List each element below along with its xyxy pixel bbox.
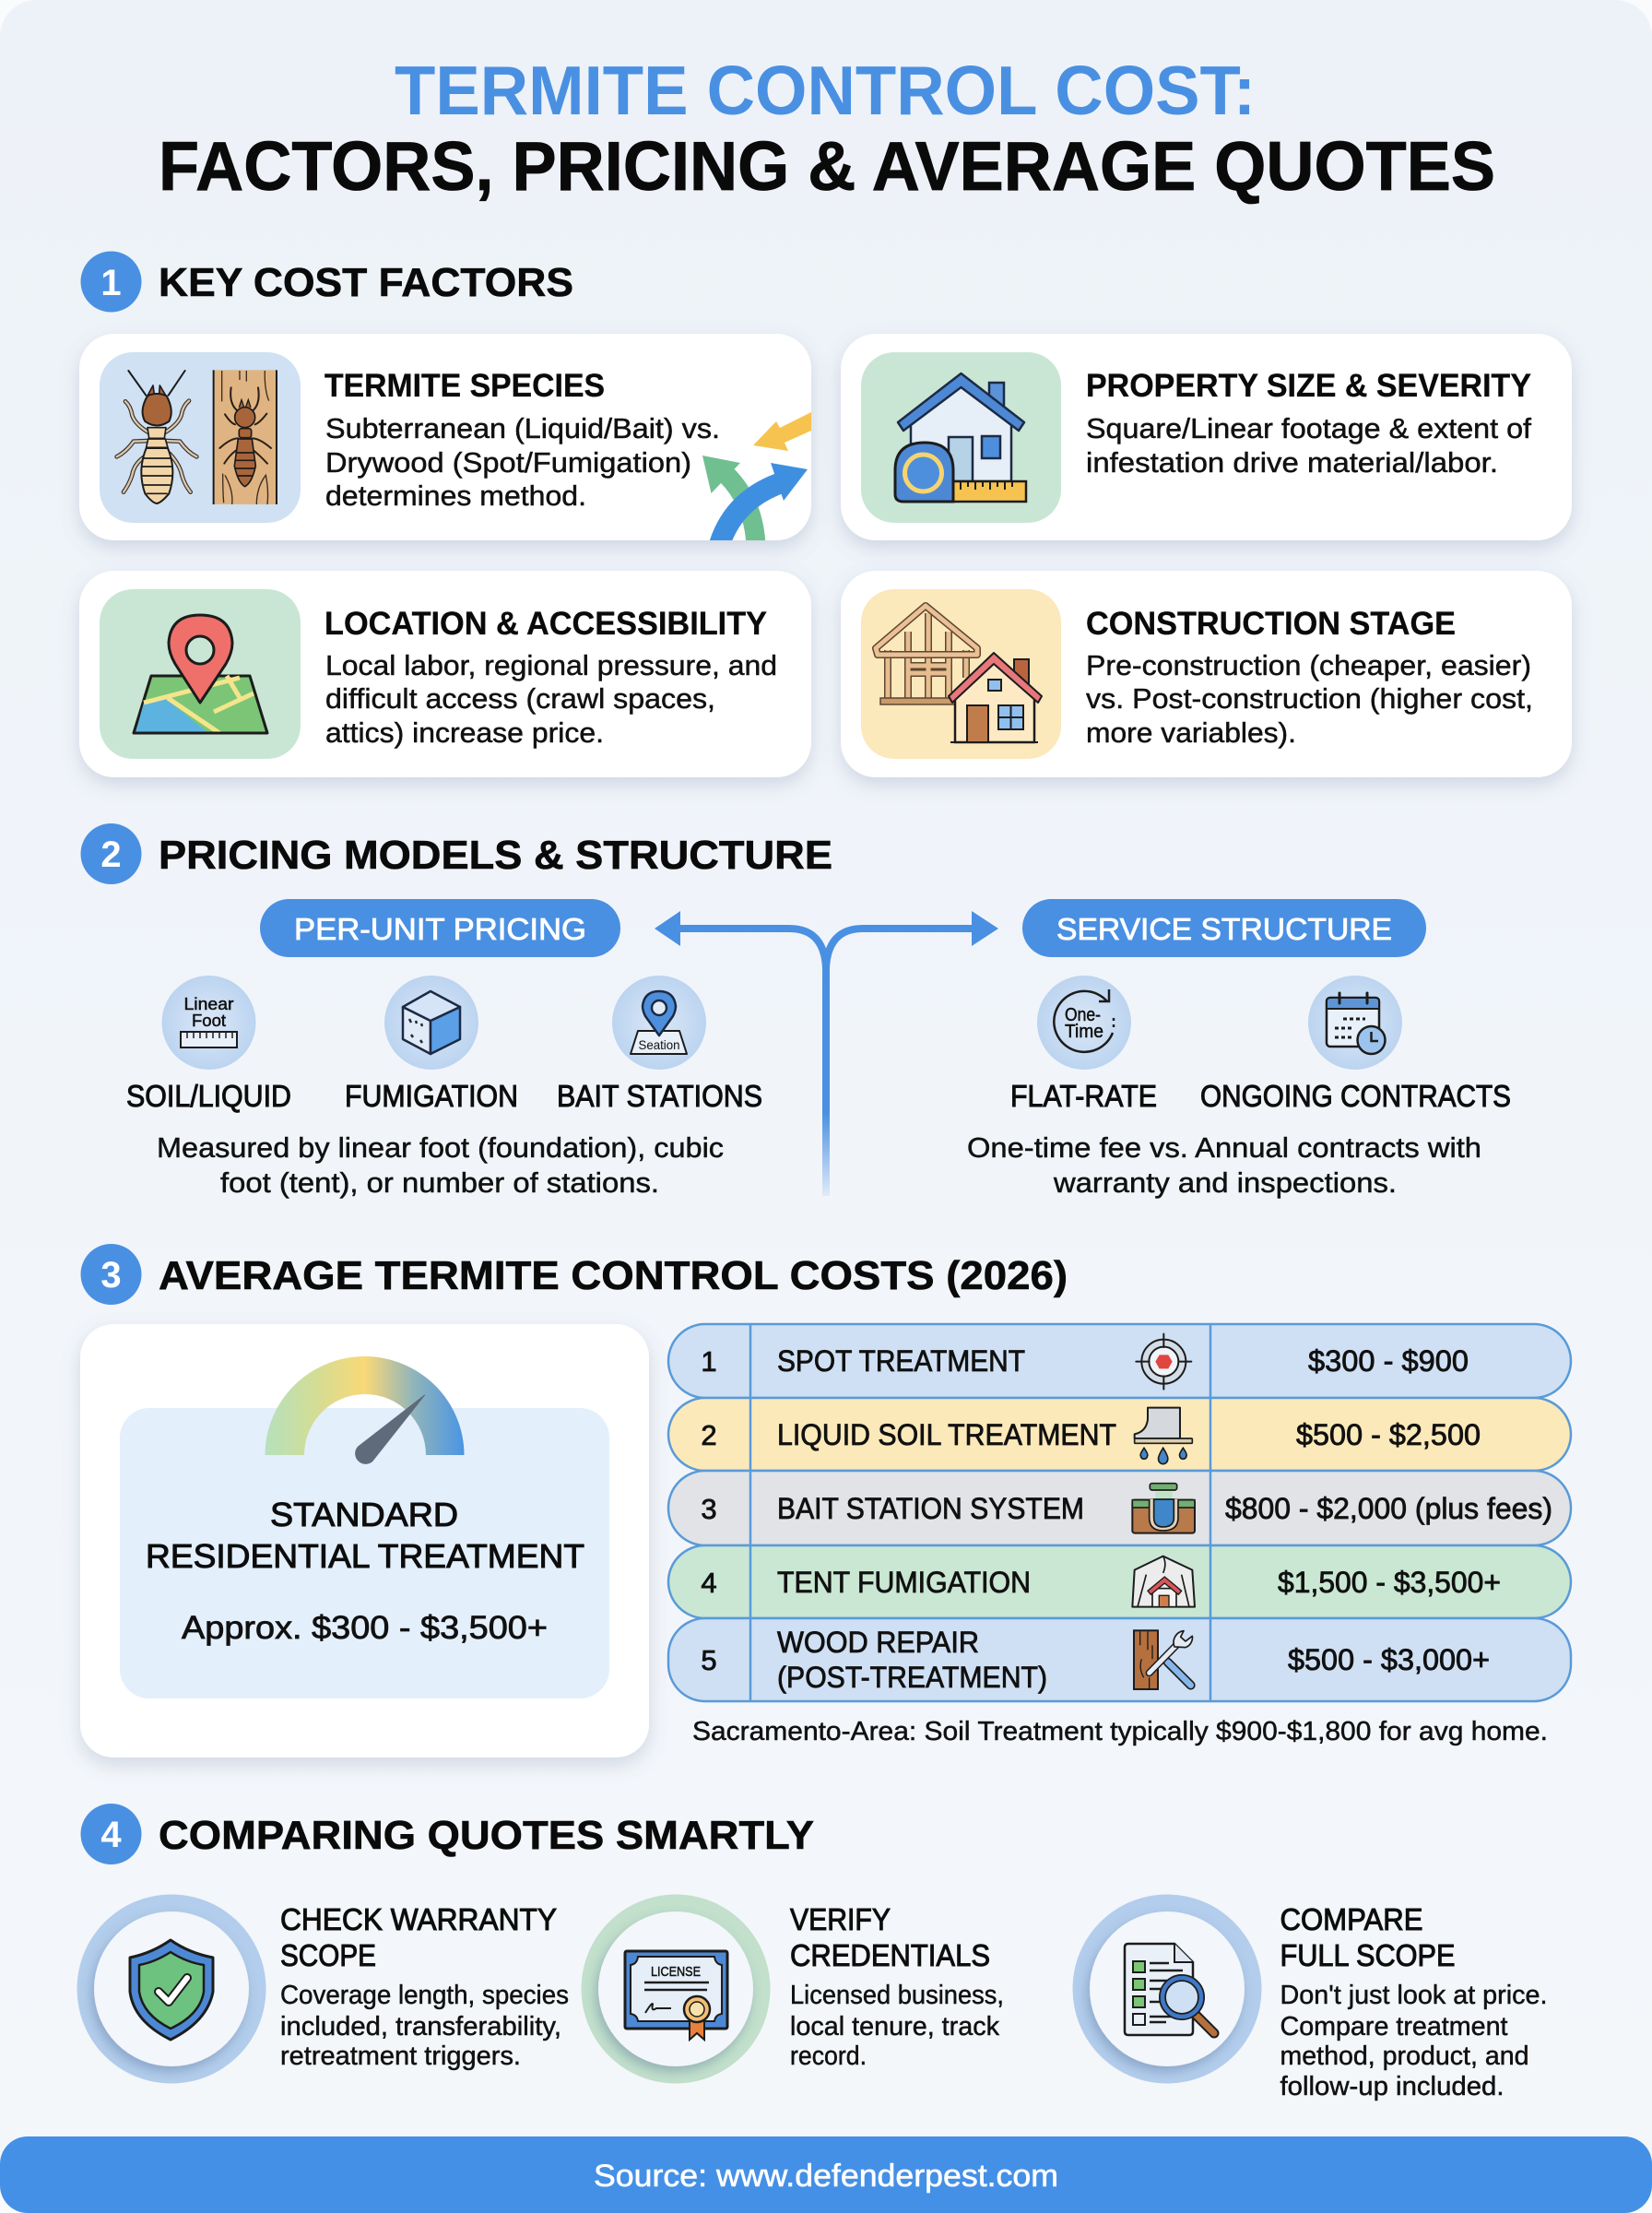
icon: linear foot: Foot [192,1012,226,1030]
text: location description: Local labor, regional pressure, and [325,649,777,681]
label: flat-rate: FLAT-RATE [1010,1079,1157,1113]
icon: bait station pin [612,976,706,1070]
text: compare description: method, product, and [1280,2041,1528,2071]
text: service description: warranty and inspections. [1053,1166,1397,1199]
text: treatment label: RESIDENTIAL TREATMENT [146,1537,584,1575]
heading: verify credentials: VERIFY [790,1902,891,1936]
section heading: average costs: AVERAGE TERMITE CONTROL COSTS (2026) [159,1253,1068,1298]
heading: compare full scope: COMPARE [1280,1902,1423,1936]
panel: verify credentials [581,1894,1004,2084]
pill: per-unit pricing: PER-UNIT PRICING [294,912,586,946]
row 3: bait station system [668,1471,1571,1545]
panel: construction stage [841,571,1572,777]
text: sacramento footnote: Sacramento-Area: Soil Treatment typically $900-$1,800 for avg home. [692,1717,1548,1746]
section heading: pricing models: 2 [100,834,122,875]
text: treatment label [146,1496,584,1575]
row 2: liquid soil treatment: 2 [701,1419,717,1451]
title [159,52,1495,205]
text: property size description [1086,412,1531,479]
icon: house frame and finished house [861,589,1061,759]
row 2: liquid soil treatment: LIQUID SOIL TREATMENT [777,1418,1116,1451]
row 4: tent fumigation: TENT FUMIGATION [777,1566,1031,1599]
text: termite species description [325,412,720,512]
table: treatment costs [668,1324,1571,1701]
text: per-unit description: foot (tent), or number of stations. [220,1166,659,1199]
row 1: spot treatment: 1 [701,1345,717,1378]
row 5: wood repair [668,1618,1571,1701]
heading: check warranty scope: CHECK WARRANTY [280,1902,557,1936]
text: credentials description: Licensed business, [790,1981,1004,2010]
section heading: average costs [81,1244,1068,1305]
text: termite species description: determines method. [325,479,586,512]
panel: check warranty scope [77,1894,569,2084]
title: TERMITE CONTROL COST: [395,52,1256,129]
pill: per-unit pricing [260,899,620,957]
text: treatment label: STANDARD [270,1496,458,1533]
label: soil/liquid: SOIL/LIQUID [126,1079,291,1113]
section heading: average costs: 3 [100,1255,122,1296]
label: fumigation: FUMIGATION [345,1079,518,1113]
row 1: spot treatment: SPOT TREATMENT [777,1344,1025,1378]
footer: source bar [0,2136,1652,2213]
text: location description [325,649,777,749]
icon: calendar with clock [1308,976,1402,1070]
section heading: key cost factors: 1 [100,263,122,303]
text: approximate price: Approx. $300 - $3,500+ [182,1610,548,1646]
row 5: wood repair: (POST-TREATMENT) [777,1661,1047,1694]
section heading: key cost factors [81,251,573,312]
icon: bait station pin: Seation [638,1037,680,1052]
row 5: wood repair: $500 - $3,000+ [1288,1643,1490,1676]
text: warranty description: retreatment triggers. [280,2041,521,2071]
icon: one-time [1037,976,1131,1070]
icon: linear foot: Linear [184,995,234,1013]
row 4: tent fumigation: $1,500 - $3,500+ [1278,1566,1501,1599]
heading: location: LOCATION & ACCESSIBILITY [324,606,767,642]
heading: verify credentials [790,1902,990,1972]
section heading: pricing models: PRICING MODELS & STRUCTURE [159,833,832,878]
text: property size description: Square/Linear footage & extent of [1086,412,1531,444]
icon: house with tape measure [861,352,1061,523]
row 5: wood repair: WOOD REPAIR [777,1626,979,1659]
icon: linear foot [162,976,256,1070]
row 3: bait station system: 3 [701,1493,717,1525]
panel: property size and severity [841,334,1572,540]
text: credentials description [790,1981,1004,2071]
pill: service structure [1022,899,1426,957]
heading: check warranty scope [280,1902,557,1972]
text: compare description: Don't just look at price. [1280,1981,1547,2010]
heading: compare full scope: FULL SCOPE [1280,1938,1455,1972]
text: construction stage description [1086,649,1533,749]
text: construction stage description: vs. Post-construction (higher cost, [1086,682,1533,715]
text: per-unit description [157,1131,724,1199]
text: credentials description: record. [790,2041,867,2071]
text: termite species description: Drywood (Spot/Fumigation) [325,446,691,479]
gauge [266,1356,465,1463]
heading: check warranty scope: SCOPE [280,1938,376,1972]
arrow: branching connector [655,911,998,1196]
heading: compare full scope [1280,1902,1455,1972]
section heading: comparing quotes: COMPARING QUOTES SMARTLY [159,1813,814,1858]
text: compare description: Compare treatment [1280,2012,1508,2041]
row 2: liquid soil treatment [668,1398,1571,1471]
row 4: tent fumigation: 4 [701,1567,717,1599]
text: termite species description: Subterranean (Liquid/Bait) vs. [325,412,720,444]
panel: termite species [79,334,811,546]
row 3: bait station system: BAIT STATION SYSTEM [777,1492,1084,1525]
title: FACTORS, PRICING & AVERAGE QUOTES [159,127,1495,205]
panel: location and accessibility [79,571,811,777]
label: ongoing contracts: ONGOING CONTRACTS [1200,1079,1511,1113]
heading: construction stage: CONSTRUCTION STAGE [1086,606,1456,642]
icon: shield with check [77,1894,266,2084]
icon: one-time: Time [1065,1022,1103,1042]
text: service description: One-time fee vs. Annual contracts with [967,1131,1481,1164]
text: compare description [1280,1981,1547,2101]
heading: termite species: TERMITE SPECIES [324,368,605,404]
pill: service structure: SERVICE STRUCTURE [1056,912,1392,946]
icon: termites [100,352,301,523]
icon: license certificate [581,1894,771,2084]
row 4: tent fumigation [668,1545,1571,1618]
heading: verify credentials: CREDENTIALS [790,1938,990,1972]
text: construction stage description: Pre-construction (cheaper, easier) [1086,649,1531,681]
icon: one-time: One- [1065,1005,1101,1025]
text: property size description: infestation drive material/labor. [1086,446,1498,479]
text: warranty description: included, transferability, [280,2012,561,2041]
row 2: liquid soil treatment: $500 - $2,500 [1296,1418,1481,1451]
section heading: comparing quotes: 4 [100,1815,122,1855]
text: warranty description [280,1981,569,2071]
label: bait stations: BAIT STATIONS [557,1079,762,1113]
panel: standard residential treatment [80,1324,649,1757]
icon: map with pin [100,589,301,759]
row 3: bait station system: $800 - $2,000 (plus fees) [1225,1492,1552,1525]
icon: fumigation cube [384,976,478,1070]
icon: corner arrows [702,412,811,546]
row 1: spot treatment [668,1324,1571,1398]
text: credentials description: local tenure, track [790,2012,999,2041]
section heading: comparing quotes [81,1804,814,1864]
text: location description: attics) increase price. [325,716,604,749]
row 5: wood repair: 5 [701,1644,717,1676]
text: service description [967,1131,1481,1199]
text: construction stage description: more variables). [1086,716,1296,749]
text: per-unit description: Measured by linear foot (foundation), cubic [157,1131,724,1164]
text: location description: difficult access (crawl spaces, [325,682,715,715]
panel: compare full scope [1073,1894,1547,2101]
heading: property size: PROPERTY SIZE & SEVERITY [1086,368,1531,404]
icon: license certificate: LICENSE [651,1964,701,1980]
icon: checklist with magnifier [1073,1894,1261,2084]
text: compare description: follow-up included. [1280,2072,1504,2101]
row 1: spot treatment: $300 - $900 [1308,1344,1469,1378]
text: warranty description: Coverage length, species [280,1981,569,2010]
section heading: key cost factors: KEY COST FACTORS [159,260,573,305]
section heading: pricing models [81,823,832,884]
footer: source bar: Source: www.defenderpest.com [594,2159,1058,2194]
